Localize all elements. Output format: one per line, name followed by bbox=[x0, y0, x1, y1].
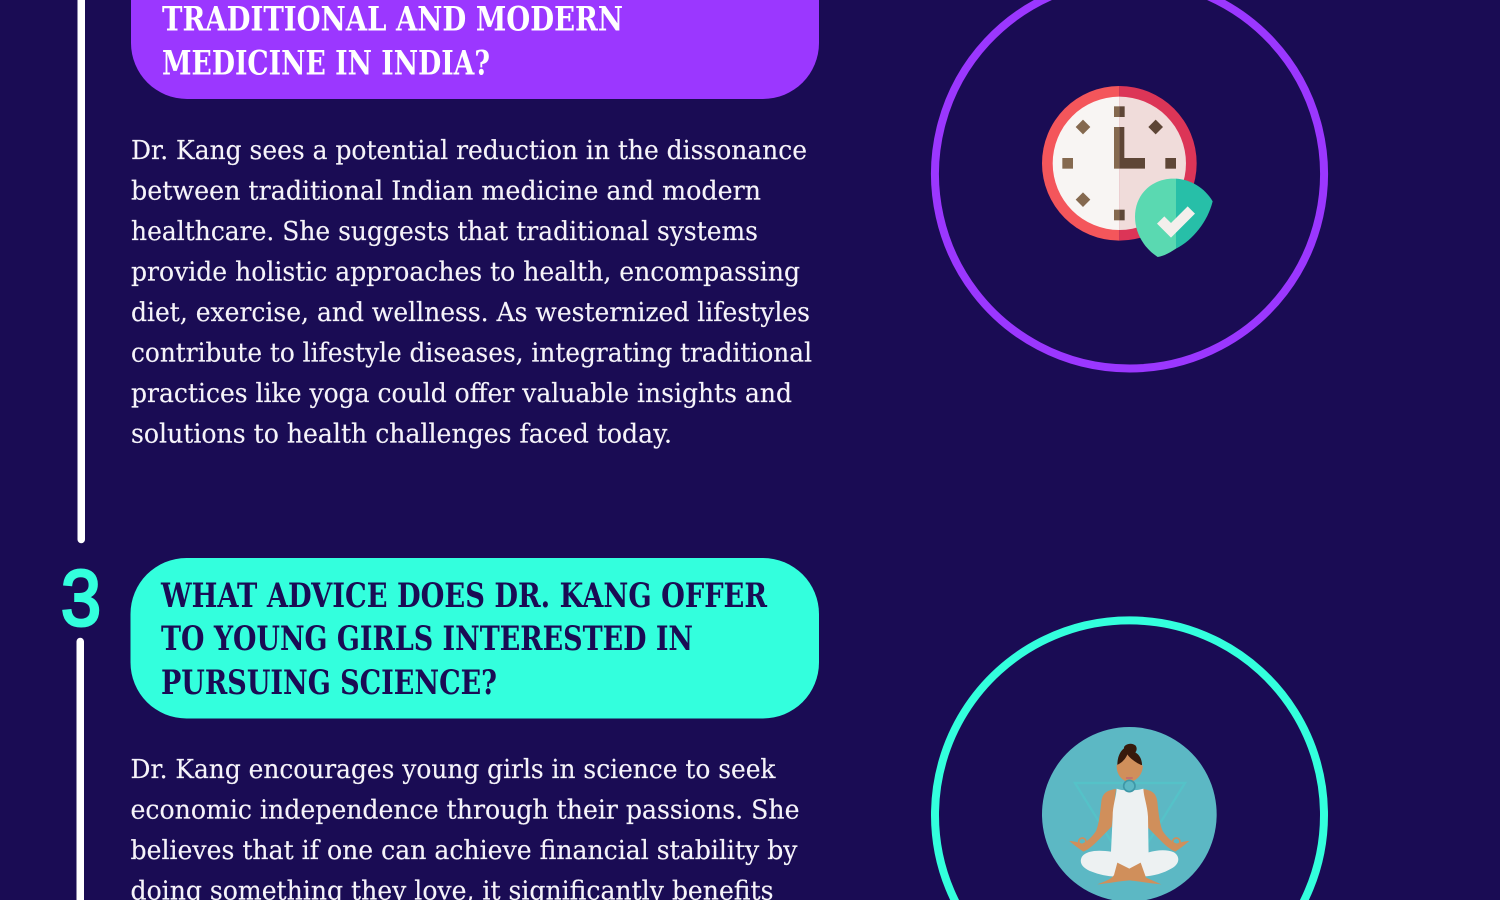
icon: clock with shield check bbox=[1042, 86, 1213, 257]
body text: section 2: contribute to lifestyle diseases, integrating traditional bbox=[131, 338, 812, 368]
heading pill: section 3: TO YOUNG GIRLS INTERESTED IN bbox=[161, 619, 693, 658]
heading pill: section 2: MEDICINE IN INDIA? bbox=[162, 44, 490, 82]
heading pill: section 3: PURSUING SCIENCE? bbox=[161, 663, 497, 702]
body text: section 2: Dr. Kang sees a potential reduction in the dissonance bbox=[131, 136, 807, 166]
heading pill: section 2: TRADITIONAL AND MODERN bbox=[162, 0, 623, 38]
section number 3: 3 bbox=[61, 553, 101, 642]
body text: section 2: practices like yoga could offer valuable insights and bbox=[131, 379, 792, 409]
body text: section 2: between traditional Indian medicine and modern bbox=[131, 176, 761, 206]
ring: teal bbox=[935, 620, 1324, 900]
heading pill: section 3 bbox=[130, 558, 819, 718]
heading pill: section 2 bbox=[131, 0, 819, 99]
body text: section 3: Dr. Kang encourages young girls in science to seek bbox=[130, 755, 776, 785]
body text: section 3: believes that if one can achieve financial stability by bbox=[130, 836, 798, 866]
heading pill: section 3: WHAT ADVICE DOES DR. KANG OFFER bbox=[160, 576, 768, 615]
body text: section 3 bbox=[130, 755, 800, 900]
body text: section 2: provide holistic approaches to health, encompassing bbox=[131, 258, 800, 288]
timeline line: lower segment bbox=[76, 638, 84, 900]
ring: purple bbox=[935, 0, 1324, 368]
body text: section 2 bbox=[131, 136, 812, 450]
timeline line: upper segment bbox=[78, 0, 85, 543]
body text: section 2: solutions to health challenges faced today. bbox=[131, 420, 672, 450]
icon: meditating woman bbox=[1042, 727, 1217, 900]
body text: section 3: economic independence through their passions. She bbox=[130, 796, 800, 826]
body text: section 2: healthcare. She suggests that traditional systems bbox=[131, 217, 758, 247]
body text: section 2: diet, exercise, and wellness. As westernized lifestyles bbox=[131, 298, 810, 328]
